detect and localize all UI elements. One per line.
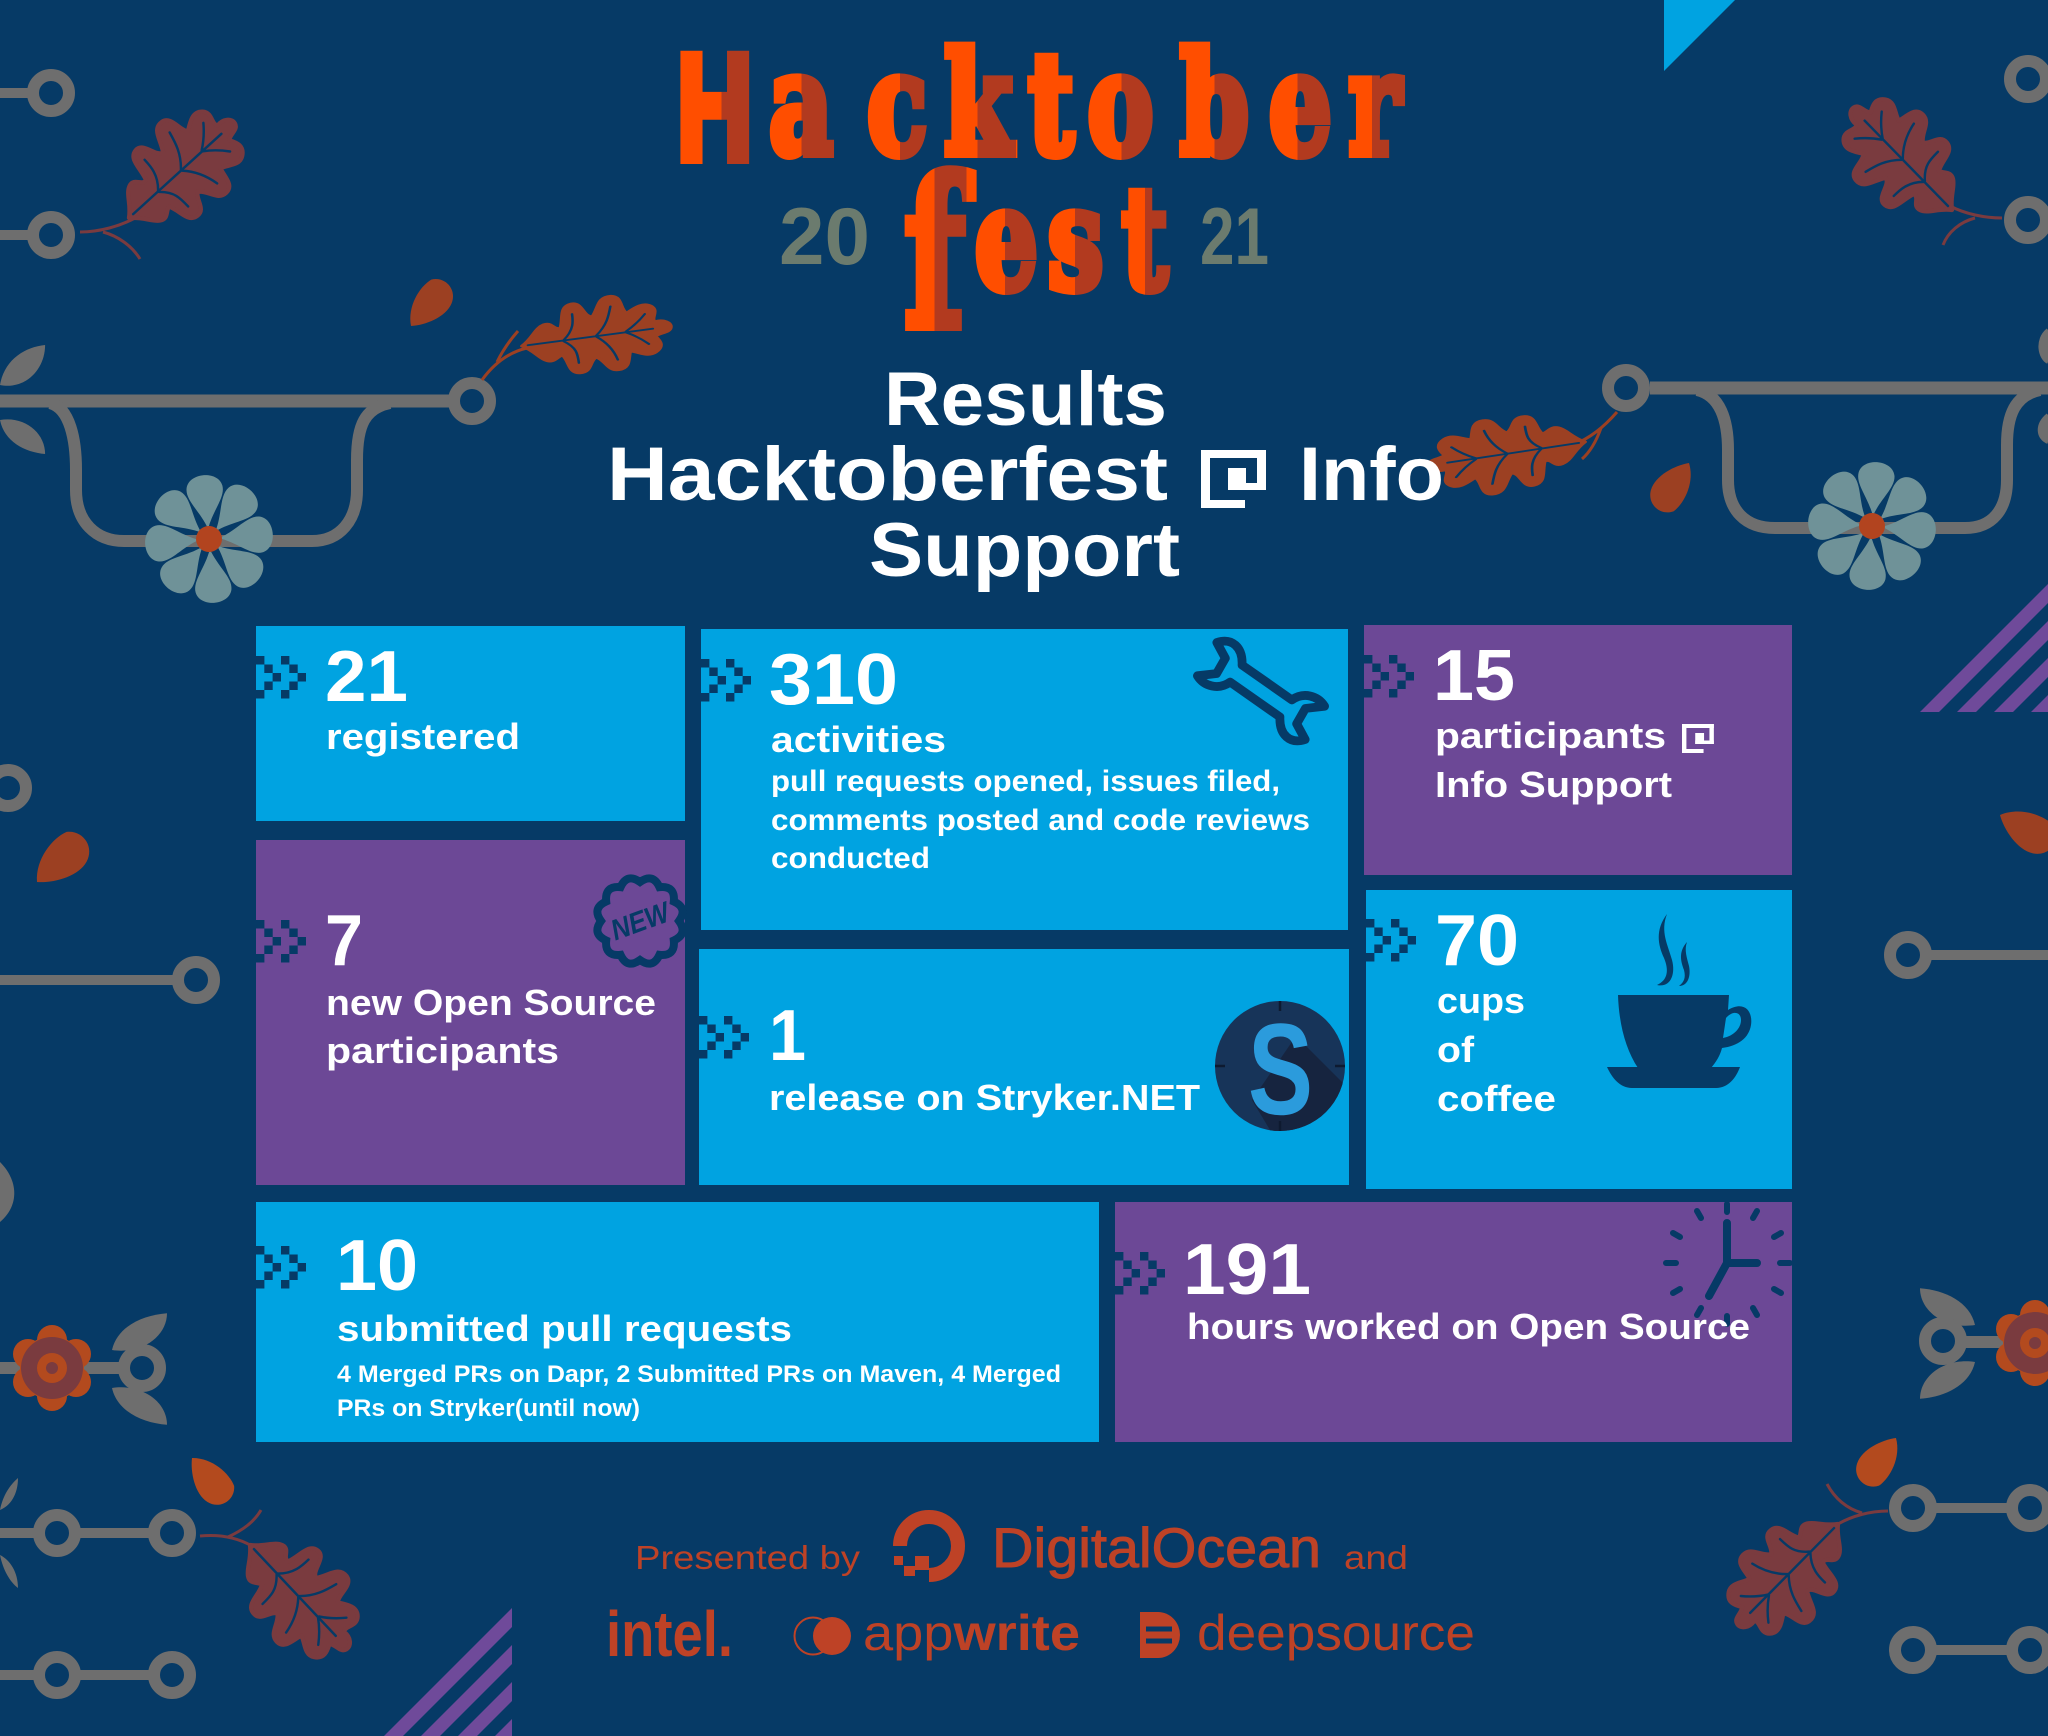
panel: 191 hours — [1115, 1202, 1792, 1442]
panel: 191 hours: 191 — [1183, 1230, 1311, 1310]
footer: sponsors — [606, 1516, 1475, 1670]
icon: wrench — [1194, 633, 1328, 749]
panel: 7 new participants: new Open Source — [326, 982, 656, 1023]
panel: 310 activities: conducted — [771, 842, 930, 875]
panel: 10 submitted pull requests: submitted pull requests — [337, 1308, 792, 1349]
text: presented by: Presented by — [635, 1539, 861, 1576]
panel: 310 activities: 310 — [769, 640, 898, 720]
panel: 21 registered: 21 — [325, 637, 408, 717]
icon: appwrite logo — [794, 1617, 851, 1655]
panel: 15 participants: 15 — [1433, 636, 1515, 716]
panel: 7 new participants — [256, 840, 685, 1185]
panel: 10 submitted pull requests: 4 Merged PRs on Dapr, 2 Submitted PRs on Maven, 4 Merged — [337, 1361, 1061, 1388]
decoration: lower right branches — [1706, 1288, 2048, 1668]
icon: new badge — [597, 878, 683, 964]
panel: 1 release — [699, 949, 1350, 1185]
decoration: upper left circuit with flower — [0, 273, 676, 608]
panel: 7 new participants: 7 — [325, 901, 363, 981]
logo year: 20: 20 — [779, 192, 870, 282]
text: appwrite: appwrite — [863, 1605, 1080, 1661]
panel: 7 new participants: participants — [326, 1030, 559, 1071]
corner triangle top — [1664, 0, 1735, 71]
panel: 15 participants: Info Support — [1435, 764, 1672, 805]
panel: 15 participants — [1364, 625, 1792, 875]
decoration: middle right pieces — [1890, 798, 2048, 973]
panel: 70 cups of coffee: of — [1437, 1029, 1475, 1070]
icon: new badge: NEW — [607, 896, 676, 947]
icon: stryker logo — [1215, 1001, 1345, 1131]
text: deepsource: deepsource — [1197, 1605, 1475, 1661]
icon: DigitalOcean logo — [894, 1517, 958, 1576]
logo word: fest: f — [904, 134, 973, 375]
title line 2 end: Info — [1299, 432, 1444, 517]
title line 3: Support — [869, 508, 1180, 593]
panel: 1 release: release on Stryker.NET — [769, 1077, 1200, 1118]
panel: 70 cups of coffee: coffee — [1437, 1078, 1556, 1119]
text: intel: intel. — [606, 1598, 733, 1670]
icon: small at sign — [1682, 724, 1714, 753]
logo word: Hacktober: acktober — [769, 23, 1402, 187]
text: DigitalOcean: DigitalOcean — [992, 1516, 1321, 1579]
panel: 191 hours: hours worked on Open Source — [1187, 1306, 1750, 1347]
icon: stryker logo: S — [1248, 996, 1313, 1142]
decoration: top right branches — [1818, 61, 2046, 245]
icon: at sign — [1201, 450, 1266, 508]
panel: 310 activities — [701, 629, 1348, 930]
logo year: 21: 21 — [1200, 192, 1269, 282]
panel: 310 activities: comments posted and code reviews — [771, 804, 1310, 837]
panel: 10 submitted pull requests: 10 — [336, 1226, 418, 1306]
panel: 10 submitted pull requests — [256, 1202, 1099, 1442]
panel: 10 submitted pull requests: PRs on Stryker(until now) — [337, 1395, 640, 1422]
decoration: lower left branches — [0, 1313, 383, 1693]
decoration: middle left pieces — [0, 770, 214, 1222]
panel: 70 cups of coffee: 70 — [1435, 901, 1519, 981]
panel: 1 release: 1 — [769, 996, 806, 1076]
logo word: Hacktober: H — [677, 25, 753, 191]
decoration: top left branches — [0, 75, 266, 259]
icon: coffee cup — [1607, 914, 1751, 1088]
decoration: bottom left stripes — [384, 1608, 512, 1736]
title line 1: Results — [884, 357, 1167, 442]
panel: 310 activities: activities — [771, 719, 946, 760]
logo word: fest: est — [975, 158, 1168, 322]
panel: 21 registered — [256, 626, 685, 821]
logo: Hacktoberfest — [677, 23, 1402, 375]
icon: deepsource logo — [1140, 1612, 1180, 1658]
panel: 70 cups of coffee — [1366, 890, 1792, 1189]
text: and: and — [1344, 1539, 1408, 1576]
panel: 70 cups of coffee: cups — [1437, 980, 1525, 1021]
panel: 21 registered: registered — [326, 716, 520, 757]
icon: clock — [1666, 1204, 1790, 1324]
title — [607, 357, 1444, 593]
panel: 310 activities: pull requests opened, issues filed, — [771, 765, 1280, 798]
title line 2: Hacktoberfest — [607, 432, 1168, 517]
panel: 15 participants: participants — [1435, 715, 1666, 756]
decoration: upper right circuit with flower — [1423, 330, 2048, 595]
decoration: top right stripes — [1920, 584, 2048, 712]
